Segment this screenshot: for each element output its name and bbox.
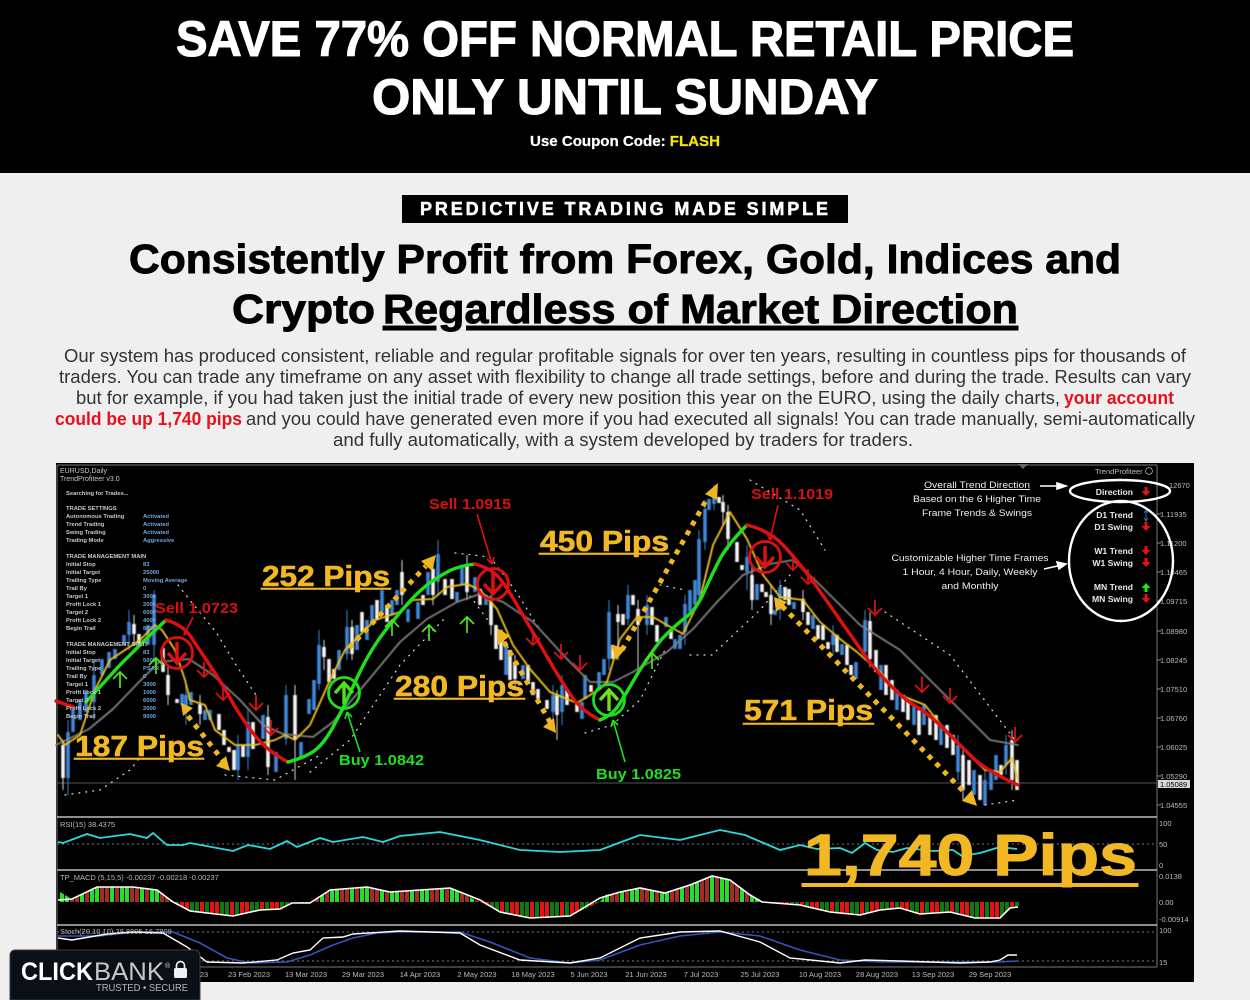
price axis: 100 [1159,926,1172,935]
price axis: 1.11200 [1160,539,1187,548]
main heading: Crypto [232,286,375,332]
date axis: 13 Sep 2023 [912,970,954,979]
callout: customizable time frames [892,553,1066,592]
price axis: 1.11935 [1160,510,1187,519]
date axis: 29 Mar 2023 [342,970,384,979]
trade settings readout: Autonomous Trading [66,514,125,520]
trade settings readout: Target 1 [66,682,89,688]
icon: padlock [174,962,187,978]
candlesticks [63,485,1017,805]
callout: customizable time frames: and Monthly [942,581,999,592]
price axis [1157,481,1190,967]
trade settings readout: EURUSD,Daily [60,468,108,475]
trend dashboard: MN Swing [1092,594,1133,604]
price axis: 1.05290 [1160,772,1187,781]
ClickBank badge: BANK [94,958,164,986]
price axis: 1.06760 [1160,714,1187,723]
price axis: -0.00914 [1159,915,1189,924]
callout: overall trend direction: Overall Trend Direction [924,480,1030,491]
trade settings readout: TrendProfiteer v3.0 [60,476,120,483]
trade settings readout: 0 [143,586,146,592]
intro paragraph: could be up 1,740 pips [55,408,242,429]
trade settings readout: Initial Stop [66,562,96,568]
trade settings readout: Begin Trail [66,714,96,720]
date axis [200,970,1011,979]
trade settings readout: Profit Lock 2 [66,706,101,712]
trade settings readout: 3000 [143,594,156,600]
trade settings readout: Activated [143,514,170,520]
banner headline line 2: ONLY UNTIL SUNDAY [372,69,878,125]
main heading [129,236,1121,332]
buy marker 1.0825 [594,684,681,783]
buy marker 1.0825: Buy 1.0825 [596,766,681,783]
trade settings readout: Trailing Type [66,666,102,672]
trade settings readout: Moving Average [143,578,188,584]
price axis: 1.05089 [1160,780,1187,789]
date axis: 13 Mar 2023 [285,970,327,979]
date axis: 14 Apr 2023 [400,970,440,979]
trade settings readout: 0 [143,674,146,680]
eyebrow label [402,195,848,223]
trade settings readout: TRADE MANAGEMENT MAIN [66,554,146,560]
ClickBank badge: CLICK [21,958,93,986]
RSI indicator: RSI(15) 38.4375 [60,820,115,829]
pip label: 187 pips: 187 Pips [75,731,204,763]
callout: overall trend direction: Frame Trends & Swings [922,508,1032,519]
intro paragraph: and fully automatically, with a system developed by traders for traders. [333,429,913,450]
intro paragraph: but for example, if you had taken just the initial trade of every new position this year on the EURO, using the daily charts, [76,387,1060,408]
price axis: 1.08245 [1160,656,1187,665]
sell marker 1.0723: Sell 1.0723 [155,600,238,617]
trend dashboard: W1 Swing [1092,558,1133,568]
trade settings readout: TRADE SETTINGS [66,506,117,512]
price axis: 1.08980 [1160,627,1187,636]
trade settings readout: 5000 [143,658,156,664]
gold trend arrow: 252 pips [349,555,436,648]
date axis: 18 May 2023 [511,970,555,979]
trade settings readout: Target 2 [66,610,88,616]
trade settings readout: TRADE MANAGEMENT SPLIT [66,642,148,648]
buy marker 1.0842 [328,678,424,769]
gold trend arrow: 280 pips [497,628,556,733]
price axis: 12670 [1169,481,1190,490]
intro paragraph: and you could have generated even more if you had executed all signals! You can trade manually, semi-automatically [246,408,1196,429]
trade settings readout: Initial Target [66,570,100,576]
trade settings readout: Profit Lock 2 [66,618,101,624]
trade settings readout: 83 [143,650,150,656]
trade settings readout: Searching for Trades... [66,491,129,497]
callout: customizable time frames: 1 Hour, 4 Hour, Daily, Weekly [902,567,1038,578]
stochastic indicator: Stoch(20,10,10) 28.8895 16.7809 [60,927,172,936]
sell marker 1.1019 [750,486,833,572]
trade settings readout: 2000 [143,602,156,608]
trade settings readout: Activated [143,522,170,528]
trading chart panel [56,463,1194,982]
price axis: 1.04555 [1160,801,1187,810]
gold trend arrow: 571 pips [774,597,977,806]
intro paragraph: traders. You can trade any timeframe on any asset with flexibility to change all trade settings, before and during the trade. Results can vary [59,366,1192,387]
promo banner [0,0,1250,173]
stochastic indicator [57,927,1157,963]
trade settings readout: 3000 [143,682,156,688]
trade settings readout: 1000 [143,690,156,696]
pip label: 280 pips: 280 Pips [395,671,524,703]
price axis: 0.00 [1159,898,1174,907]
eyebrow label: PREDICTIVE TRADING MADE SIMPLE [420,199,828,219]
pip label: 450 pips: 450 Pips [540,526,669,558]
trade settings readout: Target 2 [66,698,88,704]
trend dashboard: D1 Swing [1094,522,1133,532]
callout: customizable time frames: Customizable Higher Time Frames [892,553,1049,564]
trade settings readout: 9000 [143,714,156,720]
trade settings readout: Swing Trading [66,530,106,536]
trade settings readout: Profit Lock 1 [66,602,102,608]
trade settings readout: Profit Lock 1 [66,690,102,696]
sell marker 1.0915 [429,496,511,600]
trade settings readout: Activated [143,530,170,536]
sell marker 1.0723 [155,600,238,668]
trend dashboard: TrendProfiteer [1095,467,1143,476]
moving averages and parabolic dots [56,480,1018,805]
price axis: 1.09715 [1160,597,1187,606]
ClickBank badge: ® [165,962,171,970]
trade settings readout: Initial Stop [66,650,96,656]
date axis: 10 Aug 2023 [799,970,841,979]
sell marker 1.1019: Sell 1.1019 [751,486,833,503]
trade settings readout: Trend Trading [66,522,105,528]
callout: overall trend direction: Based on the 6 Higher Time [913,494,1041,505]
RSI indicator [57,820,1157,856]
trade settings readout: 2000 [143,706,156,712]
intro paragraph: your account [1064,387,1174,408]
ClickBank badge: TRUSTED • SECURE [96,982,188,994]
trade settings readout: 25000 [143,570,159,576]
pip label: 252 pips: 252 Pips [262,561,390,593]
trend dashboard: MN Trend [1094,582,1133,592]
callout: overall trend direction [913,480,1066,519]
date axis: 29 Sep 2023 [969,970,1011,979]
pip label: 571 pips: 571 Pips [744,695,873,727]
banner headline line 1: SAVE 77% OFF NORMAL RETAIL PRICE [176,11,1074,67]
price axis: 100 [1159,819,1172,828]
ClickBank badge [10,950,200,1000]
total pips label: 1,740 Pips [804,823,1137,888]
price axis: 1.07510 [1160,685,1187,694]
date axis: 7 Jul 2023 [684,970,718,979]
date axis: 23 [200,970,208,979]
main heading: Regardless of Market Direction [383,286,1018,332]
buy marker 1.0842: Buy 1.0842 [339,752,424,769]
trade settings readout: Trail By [66,586,88,592]
date axis: 23 Feb 2023 [228,970,270,979]
intro paragraph [55,345,1196,450]
trade settings readout [60,468,188,720]
price axis: 50 [1159,840,1167,849]
trend dashboard: Direction [1096,487,1133,497]
trade settings readout: Trading Mode [66,538,104,544]
MACD indicator [58,873,1020,918]
trade settings readout: Trailing Type [66,578,102,584]
trade settings readout: Initial Target [66,658,100,664]
price axis: 0.0138 [1159,872,1182,881]
gold trend arrow: 450 pips [611,483,718,660]
gold trend arrow: 187 pips [181,703,230,771]
price axis: 15 [1159,958,1167,967]
date axis: 2 May 2023 [457,970,497,979]
trend dashboard [1069,467,1173,621]
price axis: 1.06025 [1160,743,1187,752]
main heading: Consistently Profit from Forex, Gold, Indices and [129,236,1121,282]
trade settings readout: Target 1 [66,594,89,600]
trade settings readout: Trail By [66,674,88,680]
date axis: 5 Jun 2023 [570,970,608,979]
trend dashboard: W1 Trend [1094,546,1133,556]
trade settings readout: 6000 [143,610,156,616]
trade settings readout: 8000 [143,626,156,632]
trade settings readout: 83 [143,562,150,568]
coupon code: Use Coupon Code: FLASH [530,133,720,150]
trade settings readout: 6000 [143,698,156,704]
date axis: 28 Aug 2023 [856,970,898,979]
date axis: 25 Jul 2023 [741,970,779,979]
sell marker 1.0915: Sell 1.0915 [429,496,511,513]
trade settings readout: PSAR [143,666,160,672]
trend dashboard: D1 Trend [1096,510,1133,520]
price axis: 1.10465 [1160,568,1187,577]
MACD indicator: TP_MACD (5,15,5) -0.00237 -0.00218 -0.00237 [60,873,219,882]
small signal arrows [113,555,1022,742]
trade settings readout: Begin Trail [66,626,96,632]
intro paragraph: Our system has produced consistent, reliable and regular profitable signals for over ten years, resulting in countless pips for thousands of [64,345,1187,366]
date axis: 21 Jun 2023 [625,970,667,979]
trade settings readout: 4000 [143,618,156,624]
trade settings readout: Aggressive [143,538,175,544]
price axis: 0 [1159,861,1163,870]
